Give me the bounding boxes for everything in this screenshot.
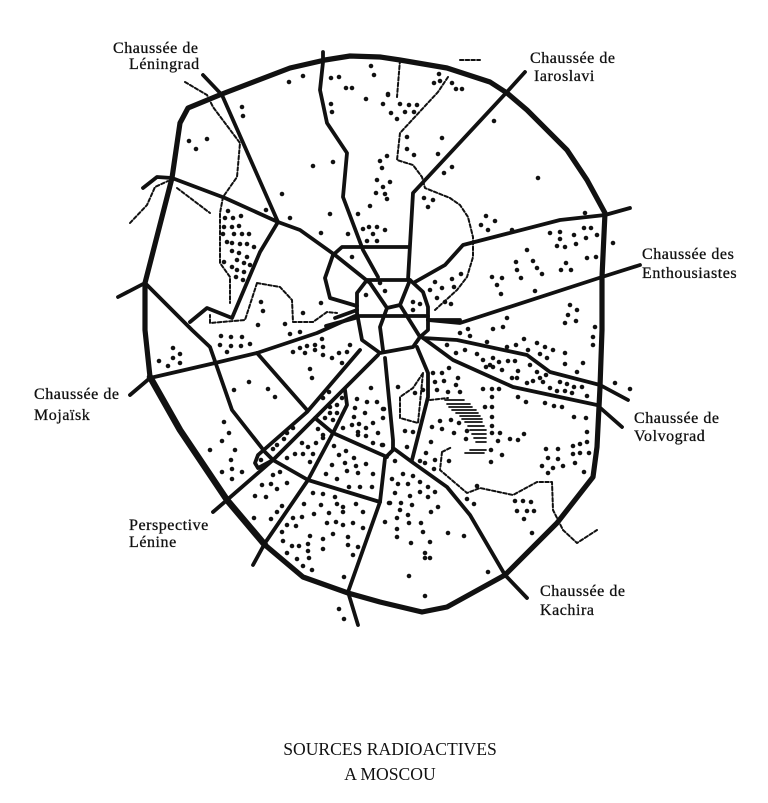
label: Chaussée de Mojaïsk: Chaussée de xyxy=(34,386,120,403)
label: Chaussée de Mojaïsk: Mojaïsk xyxy=(34,407,90,424)
outer ring road xyxy=(145,56,605,612)
road: south xyxy=(348,450,393,625)
road: Chaussée de Mojaïsk xyxy=(130,316,355,395)
title: A MOSCOU xyxy=(344,764,436,784)
hatched marsh xyxy=(445,400,486,453)
label: Chaussée de Léningrad: Chaussée de xyxy=(113,40,199,57)
label: Chaussée de Iaroslavi: Iaroslavi xyxy=(534,68,595,85)
road: inner ring xyxy=(357,280,428,353)
road: Perspective Lénine xyxy=(213,355,378,512)
road: Chaussée des Enthousiastes xyxy=(428,265,640,323)
radial and inner roads xyxy=(118,52,640,625)
radioactive source dots xyxy=(159,66,630,619)
label: Chaussée de Kachira: Chaussée de xyxy=(540,583,626,600)
road: Chaussée de Kachira xyxy=(393,448,527,598)
label: Chaussée des Enthousiastes: Enthousiastes xyxy=(642,265,737,282)
label: Perspective Lénine: Perspective xyxy=(129,517,209,534)
label: Chaussée des Enthousiastes: Chaussée des xyxy=(642,246,734,263)
road: Chaussée de Iaroslavi xyxy=(408,72,525,280)
label: Perspective Lénine: Lénine xyxy=(129,534,177,551)
label: Chaussée de Kachira: Kachira xyxy=(540,602,594,619)
label: Chaussée de Iaroslavi: Chaussée de xyxy=(530,50,616,67)
heavier stretch of ring xyxy=(150,377,265,545)
road: north xyxy=(320,52,378,277)
label: Chaussée de Volvograd: Volvograd xyxy=(634,428,705,445)
road: Chaussée de Volvograd xyxy=(423,338,628,400)
title: SOURCES RADIOACTIVES xyxy=(283,739,497,759)
road: Chaussée de Léningrad xyxy=(203,75,278,222)
label: Chaussée de Léningrad: Léningrad xyxy=(129,56,200,73)
road: west xyxy=(118,283,273,460)
map drawing xyxy=(118,52,640,625)
dotted rivers xyxy=(130,60,597,543)
road: second radial south-west xyxy=(253,390,347,565)
label: Chaussée de Volvograd: Chaussée de xyxy=(634,410,720,427)
